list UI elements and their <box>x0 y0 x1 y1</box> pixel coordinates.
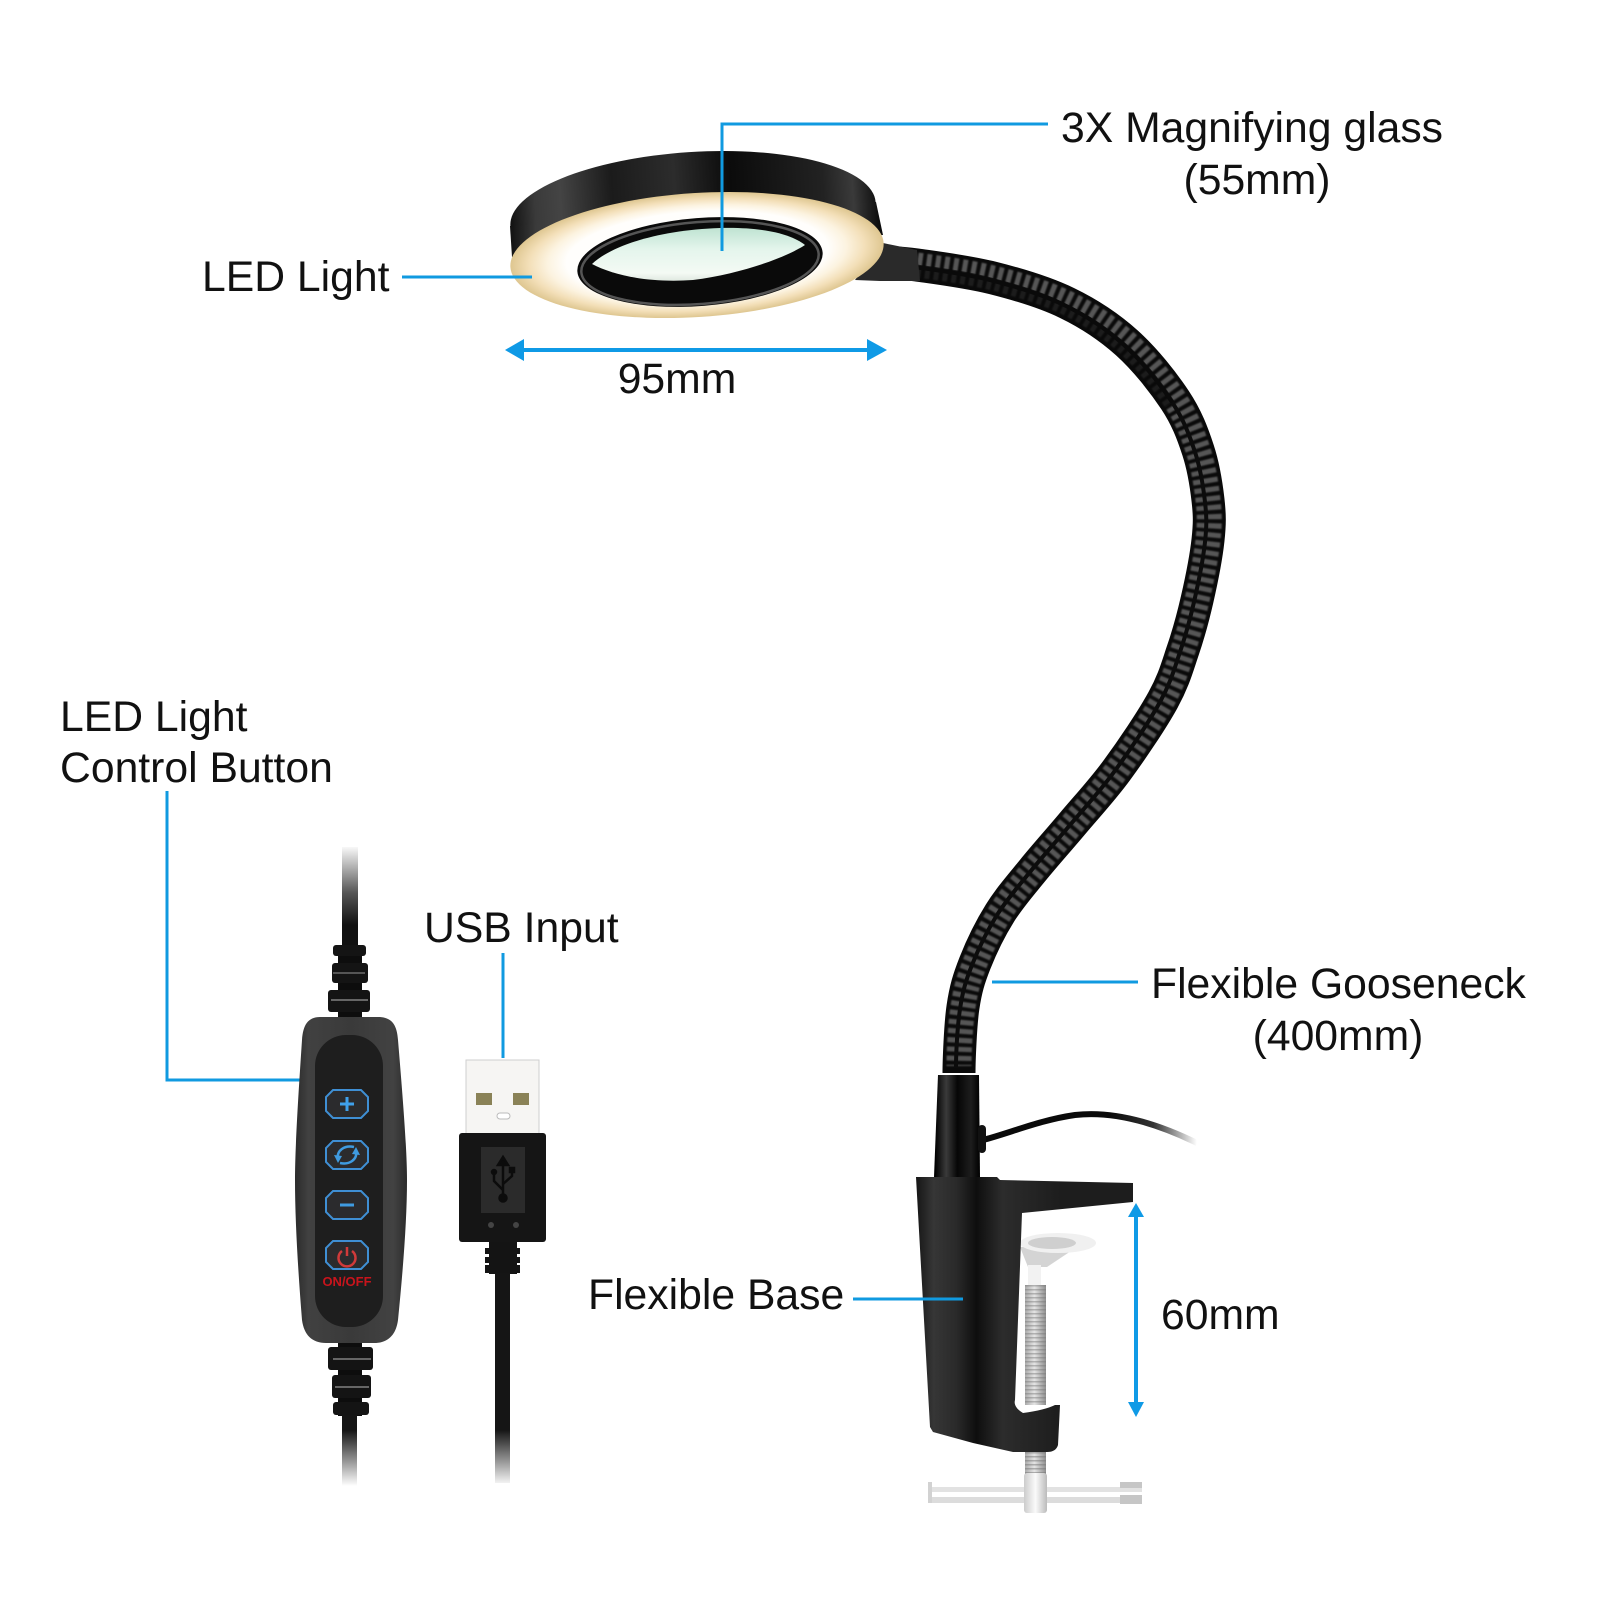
bottom cable <box>342 1415 357 1487</box>
lamp neck connector <box>855 243 920 281</box>
label: flexible gooseneck <box>1151 960 1527 1060</box>
top strain relief <box>328 945 370 1017</box>
USB strain relief <box>485 1242 520 1274</box>
clamp base assembly <box>916 1075 1197 1513</box>
LED light ring <box>506 181 888 329</box>
label: magnifying glass <box>1061 104 1443 204</box>
dimension arrow: 95mm width <box>505 339 887 361</box>
lamp shell <box>506 140 883 288</box>
label: 60mm: 60mm <box>1161 1291 1280 1339</box>
inline controller with cable <box>295 847 407 1487</box>
label: magnifying glass: (55mm) <box>1183 156 1331 204</box>
label: flexible base: Flexible Base <box>588 1271 844 1319</box>
button: mode cycle <box>326 1141 368 1169</box>
suction pad <box>1020 1233 1096 1267</box>
leader line: flexible base <box>853 1298 963 1300</box>
lower screw <box>1025 1452 1046 1478</box>
dimension arrow: 60mm height <box>1128 1203 1144 1417</box>
magnifying lens <box>574 208 826 316</box>
upper screw <box>1025 1265 1046 1405</box>
leader line: USB input <box>502 953 504 1058</box>
neck collar <box>934 1075 986 1177</box>
label: on/off: ON/OFF <box>322 1274 372 1289</box>
USB plug housing <box>459 1133 546 1242</box>
controller panel <box>315 1035 383 1327</box>
leader line: magnifying glass <box>722 124 1048 251</box>
label: flexible gooseneck: Flexible Gooseneck <box>1151 960 1527 1008</box>
controller body <box>295 1017 407 1343</box>
label: control button: Control Button <box>60 744 333 792</box>
button: power <box>326 1241 368 1269</box>
lamp head with LED ring and magnifying lens <box>506 140 920 329</box>
USB metal shell <box>466 1060 539 1134</box>
label: 95mm: 95mm <box>618 355 736 403</box>
USB trident symbol <box>492 1157 514 1202</box>
power wire <box>983 1114 1197 1143</box>
button: minus <box>326 1191 368 1219</box>
label: USB input: USB Input <box>424 904 619 952</box>
bottom strain relief <box>328 1340 373 1416</box>
button: plus <box>326 1090 368 1118</box>
label: control button: LED Light <box>60 693 248 741</box>
leader line: gooseneck <box>992 980 1138 984</box>
gooseneck arm <box>880 262 1209 1073</box>
clamp body <box>916 1177 1133 1452</box>
USB cable <box>495 1273 510 1483</box>
USB plug with cable <box>459 1060 546 1483</box>
top cable <box>342 847 358 947</box>
T handle <box>928 1473 1142 1513</box>
label: control button <box>60 693 333 792</box>
label: flexible gooseneck: (400mm) <box>1253 1012 1423 1060</box>
label: magnifying glass: 3X Magnifying glass <box>1061 104 1443 152</box>
label: LED light: LED Light <box>202 253 390 301</box>
leader line: LED light <box>402 276 532 278</box>
leader line: control button <box>167 791 322 1080</box>
